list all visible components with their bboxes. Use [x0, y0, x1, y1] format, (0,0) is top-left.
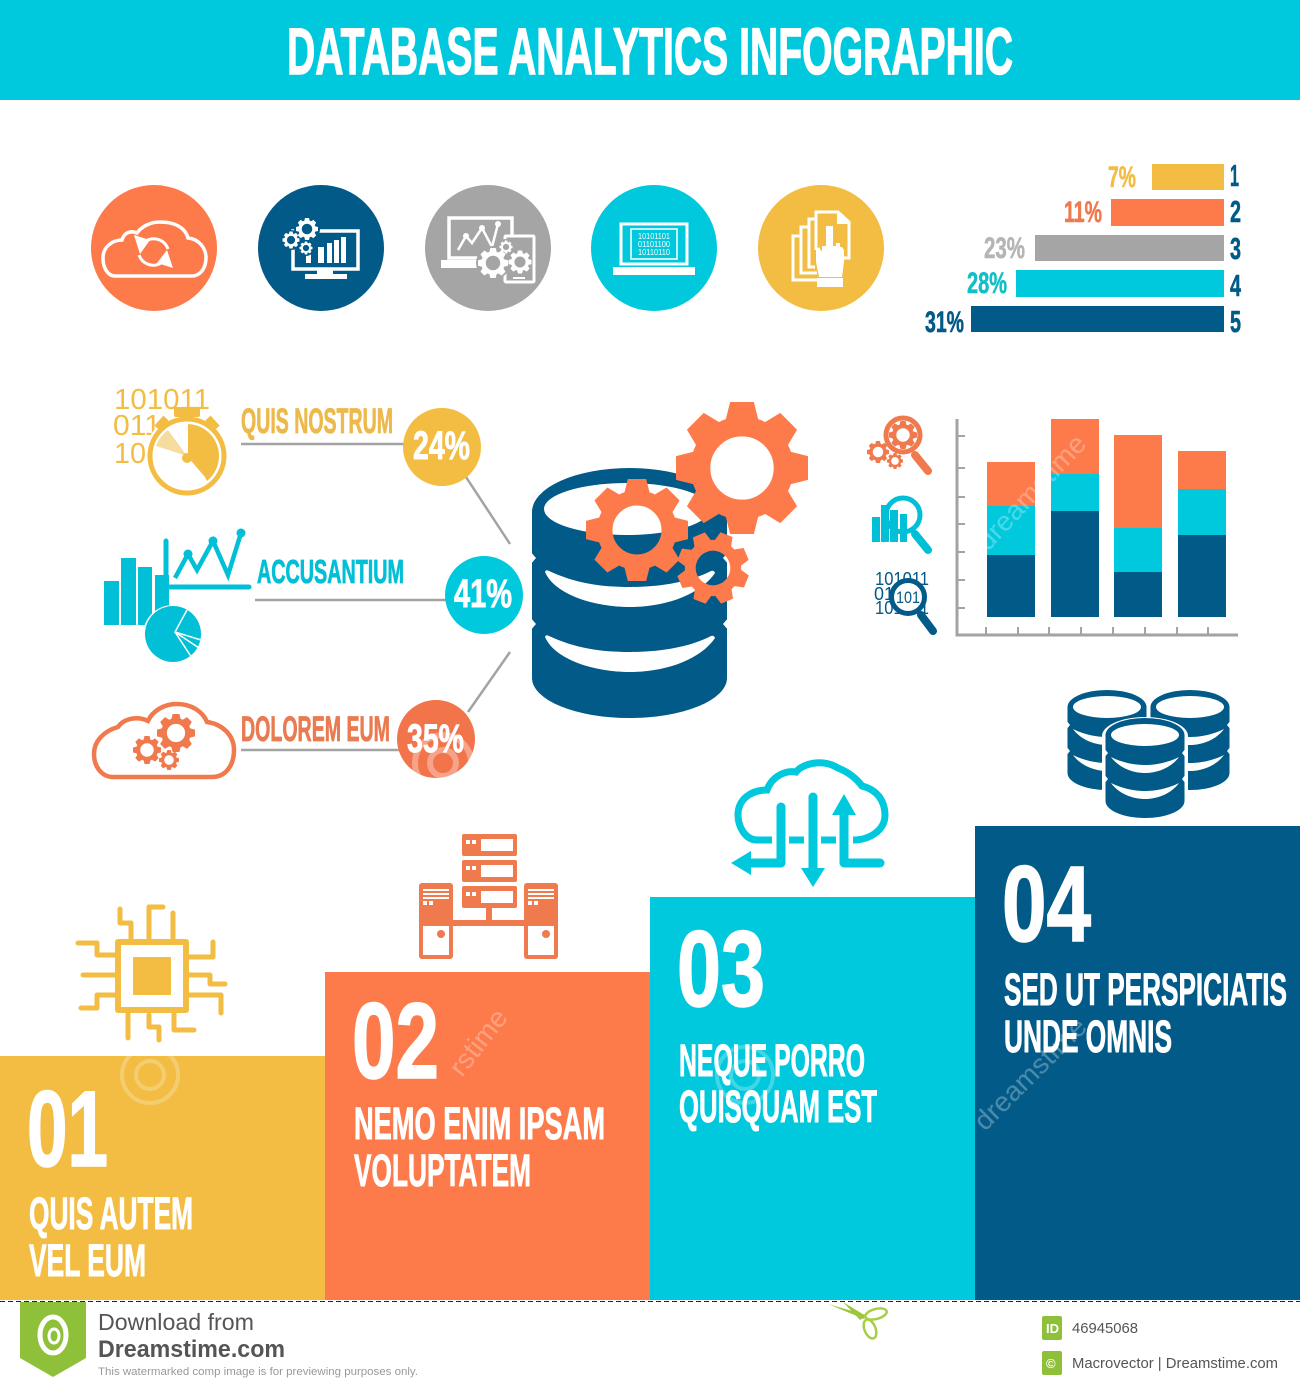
icon: cloud sync	[91, 185, 217, 311]
row: accusantium	[104, 528, 523, 665]
icon: stopwatch with binary digits: 10	[114, 438, 146, 470]
download text	[98, 1309, 418, 1378]
gear: small	[666, 521, 760, 615]
step text: UNDE OMNIS	[1004, 1011, 1172, 1062]
id badge	[1042, 1316, 1138, 1340]
icon: cloud with data arrows	[731, 763, 885, 887]
bar 3: 3	[1230, 231, 1241, 266]
step text: VEL EUM	[29, 1235, 146, 1286]
search icons	[867, 418, 933, 631]
bar 2	[1064, 194, 1241, 229]
step text	[679, 1035, 877, 1132]
step number: 02	[352, 980, 439, 1101]
icon: stopwatch with binary digits: 101011	[114, 384, 210, 416]
step text	[354, 1098, 605, 1196]
horizontal percentage bar chart	[925, 158, 1241, 339]
id badge: ID	[1046, 1321, 1059, 1336]
download text: Download from	[98, 1309, 254, 1335]
step number: 04	[1002, 843, 1091, 964]
bar 1: 7%	[1108, 161, 1136, 194]
icon: magnifier with binary: 101	[896, 588, 920, 607]
bar 5: 31%	[925, 306, 964, 339]
step text: NEMO ENIM IPSAM	[354, 1098, 605, 1149]
download text: This watermarked comp image is for previewing purposes only.	[98, 1366, 418, 1378]
step number: 03	[677, 908, 765, 1029]
step 1: quis autem	[0, 1056, 325, 1300]
gear: large	[676, 402, 808, 534]
bar 2: 2	[1230, 194, 1241, 229]
icon: laptop with binary code: 10110110	[638, 248, 671, 257]
watermark traces: dreamstime	[967, 1011, 1093, 1136]
step 3: neque porro	[650, 897, 975, 1300]
stack 1	[987, 462, 1035, 617]
bar 3	[984, 231, 1241, 266]
database cylinder	[530, 468, 729, 718]
connector lines to database	[241, 444, 510, 750]
bar 4	[967, 267, 1241, 303]
watermark traces	[442, 428, 1093, 1136]
dreamstime footer	[0, 1302, 1300, 1378]
stack 2	[1051, 419, 1099, 617]
icon: three databases	[1066, 690, 1231, 821]
icon: stopwatch with binary digits	[113, 384, 229, 498]
icon: magnifier with binary: 01	[874, 584, 894, 604]
gear: medium	[586, 479, 688, 581]
step text: VOLUPTATEM	[354, 1145, 531, 1196]
step text	[29, 1188, 193, 1286]
step text: NEQUE PORRO	[679, 1035, 865, 1086]
author badge: Macrovector | Dreamstime.com	[1072, 1355, 1278, 1372]
percentage circle: 24%	[413, 424, 470, 468]
stack 4	[1178, 451, 1226, 617]
icon: monitor with gears and bars	[258, 185, 384, 311]
percentage circle	[445, 556, 523, 634]
step text	[1004, 964, 1287, 1062]
icon: cloud with gears	[94, 704, 234, 777]
icon: magnifier with binary: 101011	[875, 569, 929, 589]
central database with gears	[530, 402, 808, 718]
id badge: 46945068	[1072, 1320, 1138, 1337]
icon: monitor and tablet with gears	[425, 185, 551, 311]
label: QUIS NOSTRUM	[241, 402, 393, 441]
step text: QUISQUAM EST	[679, 1081, 877, 1132]
step 4: sed ut	[975, 826, 1300, 1300]
bar 2: 11%	[1064, 196, 1102, 229]
percentage circle	[403, 408, 481, 486]
bar 4: 4	[1230, 268, 1241, 303]
icon: magnifier with bars	[872, 498, 928, 550]
icon: magnifier with binary: 101101	[875, 598, 929, 618]
percentage circle: 41%	[454, 572, 512, 616]
stacked bar chart	[957, 419, 1238, 635]
percentage circle: 35%	[407, 717, 464, 761]
author badge	[1042, 1351, 1278, 1375]
step number: 01	[27, 1068, 108, 1189]
row: quis nostrum	[113, 384, 481, 498]
download text: Dreamstime.com	[98, 1336, 285, 1363]
bar 5: 5	[1230, 304, 1241, 339]
header banner with title	[0, 0, 1300, 100]
icon row: five category circles	[91, 185, 884, 311]
stack 3	[1114, 435, 1162, 617]
bar 1: 1	[1230, 158, 1239, 193]
step 2: nemo enim	[325, 972, 650, 1300]
icon: processor chip	[78, 907, 225, 1040]
bar 3: 23%	[984, 232, 1025, 265]
watermark traces: dreamstime	[970, 428, 1092, 556]
icon: stopwatch with binary digits: 011	[113, 410, 161, 442]
bar 1	[1108, 158, 1239, 194]
icon: magnifier with gears	[867, 418, 928, 471]
logo pennant	[20, 1302, 86, 1377]
watermark traces: rstime	[442, 1003, 514, 1082]
step text: QUIS AUTEM	[29, 1188, 193, 1239]
icon: server network	[419, 834, 558, 959]
row: dolorem eum	[94, 700, 475, 791]
bar 4: 28%	[967, 267, 1007, 300]
icon: charts	[104, 528, 249, 665]
author badge: ©	[1046, 1356, 1056, 1371]
percentage circle	[397, 700, 475, 791]
label: DOLOREM EUM	[241, 710, 390, 749]
icon: laptop with binary code: 01101100	[638, 240, 671, 249]
axes and ticks	[957, 419, 1238, 635]
icon: laptop with binary code: 10101101	[638, 232, 671, 241]
icon: magnifier with binary	[874, 569, 933, 631]
icon: laptop with binary code	[591, 185, 717, 311]
label: ACCUSANTIUM	[257, 553, 404, 590]
bar 5	[925, 304, 1241, 339]
icon: scissors	[828, 1302, 888, 1340]
icon: documents and hand	[758, 185, 884, 311]
